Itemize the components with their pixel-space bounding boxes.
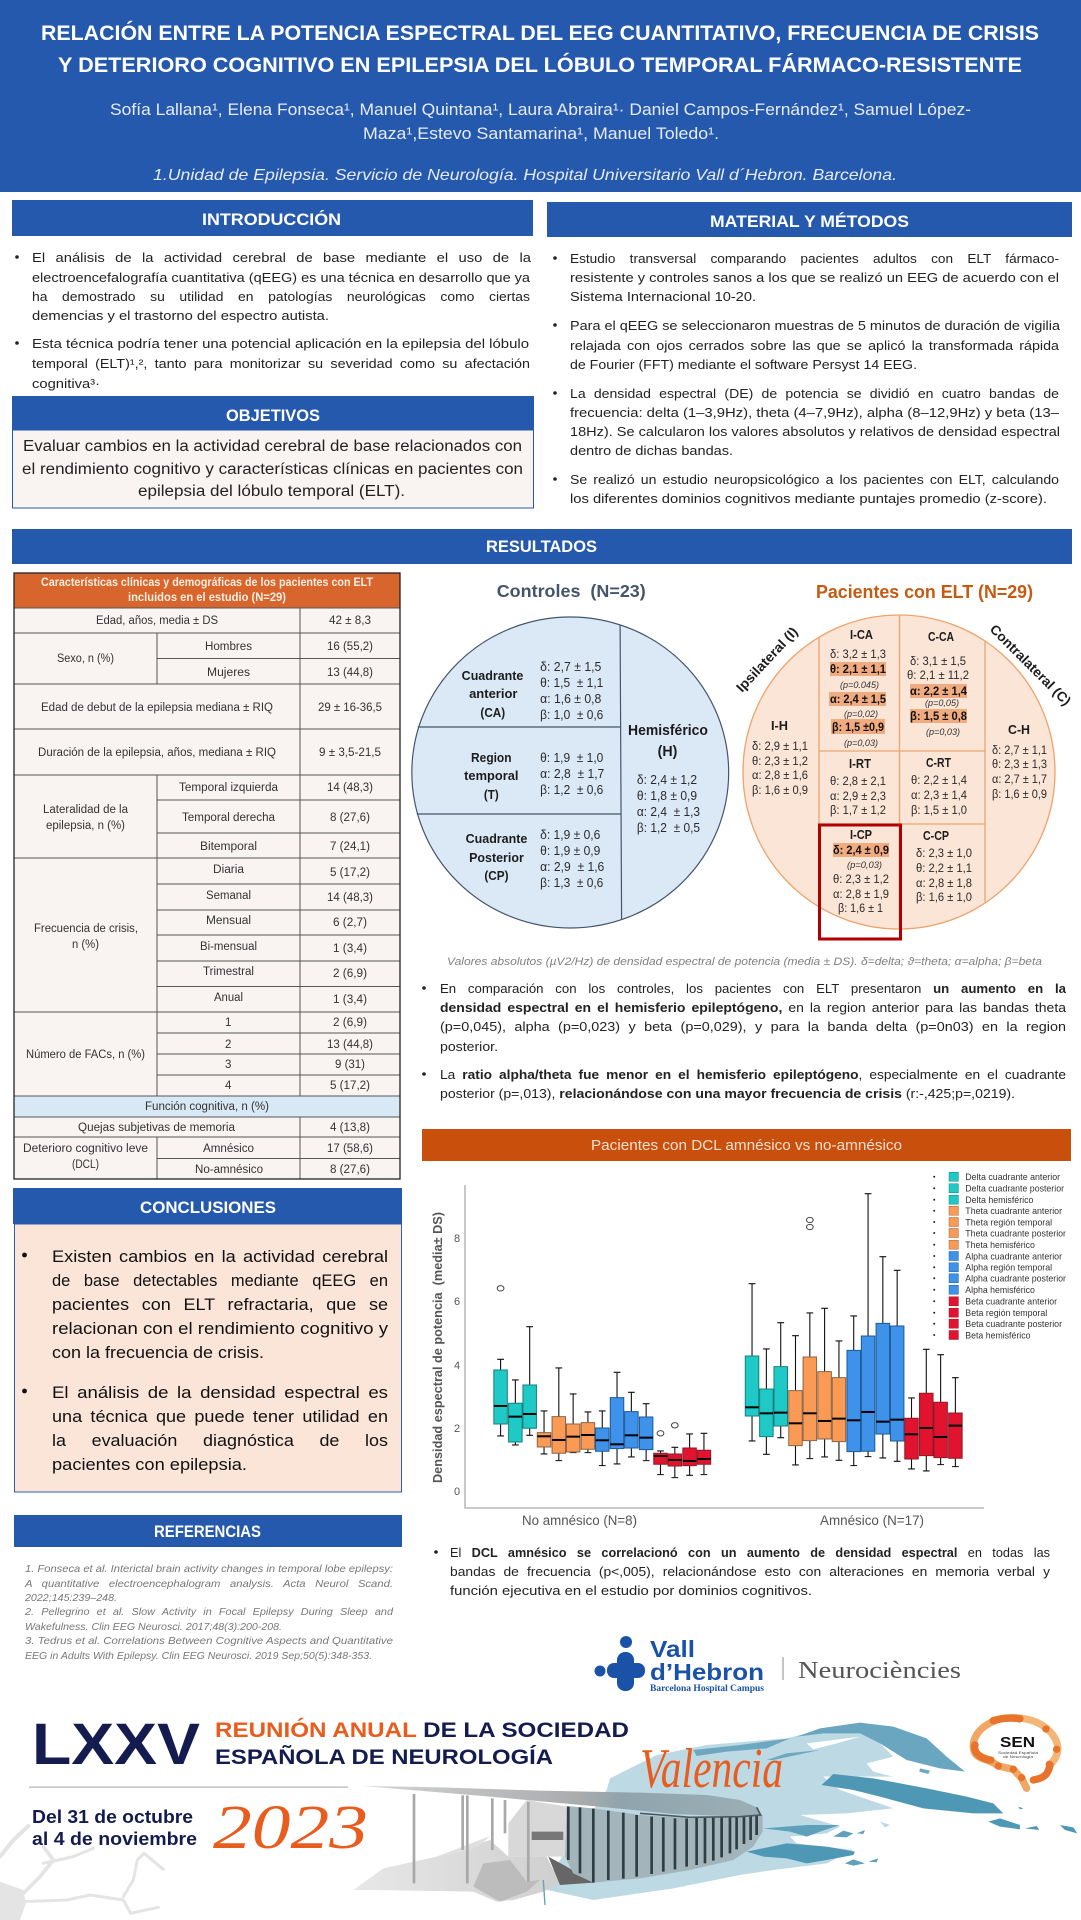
text block: references: EEG in Adults With Epilepsy. Clin EEG Neurosci. 2019 Sep;50(5):348-353.: [25, 1650, 372, 1662]
panel: referencias: [14, 1515, 402, 1662]
text block: introducción: [15, 250, 532, 391]
heading: resultados: [12, 529, 1072, 564]
region: I-H: δ: 2,9 ± 1,1: [752, 741, 808, 753]
text block: métodos: los diferentes dominios cognitivos mediante puntajes promedio (z-score).: [570, 491, 1047, 506]
logo: SEN: SEN: [1000, 1734, 1035, 1751]
region: hemisférico: δ: 2,4 ± 1,2: [637, 773, 697, 787]
table body text: 42 ± 8,3: [329, 615, 371, 627]
region: C-CA: [907, 630, 969, 738]
table body text: 8 (27,6): [330, 1164, 370, 1176]
region: C-RT: [911, 756, 968, 817]
region: C-RT: β: 1,5 ± 1,0: [911, 805, 967, 817]
region: cuadrante posterior: α: 2,9 ± 1,6: [540, 860, 604, 874]
table body text: Semanal: [206, 890, 251, 902]
text block: DCL finding: [434, 1545, 1051, 1598]
affiliation: 1.Unidad de Epilepsia. Servicio de Neurología. Hospital Universitario Vall d´Hebron. Barcelona.: [153, 167, 897, 184]
region: I-CP: α: 2,8 ± 1,9: [833, 889, 889, 901]
region: I-CA: δ: 3,2 ± 1,3: [830, 649, 886, 661]
region: cuadrante posterior: Cuadrante: [466, 831, 527, 846]
authors: [110, 100, 971, 143]
x axis labels: [522, 1513, 924, 1528]
region: cuadrante anterior: [462, 660, 603, 722]
panel: demographics table: [14, 573, 400, 1179]
table body text: Hombres: [205, 641, 252, 653]
region: I-RT: α: 2,9 ± 2,3: [830, 791, 886, 803]
table body text: Bi-mensual: [200, 941, 257, 953]
text block: introducción: Esta técnica podría tener una potencial aplicación en la epilepsia del lóbulo: [32, 336, 529, 351]
congress dates: [32, 1807, 197, 1849]
table body text: 5 (17,2): [330, 1080, 370, 1092]
text block: conclusiones: de base detectables mediante qEEG en: [52, 1272, 388, 1290]
text block: métodos: 18Hz). Se calcularon los valores absolutos y relativos de densidad espectral: [570, 424, 1060, 439]
text block: conclusiones: una técnica que puede tener utilidad en: [52, 1408, 388, 1426]
region: C-H: θ: 2,3 ± 1,3: [992, 759, 1047, 771]
region: hemisférico: θ: 1,8 ± 0,9: [637, 789, 697, 803]
table body text: 7 (24,1): [330, 841, 370, 853]
text block: métodos: Para el qEEG se seleccionaron muestras de 5 minutos de duración de vigilia: [570, 318, 1061, 333]
table body text: Bitemporal: [200, 841, 257, 853]
panel: controles diagram: [412, 581, 729, 928]
table body text: Trimestral: [203, 966, 254, 978]
region: I-CA: (p=0,03): [844, 738, 878, 749]
text block: objetivos: el rendimiento cognitivo y características clínicas en pacientes con: [22, 461, 523, 478]
region: C-RT: θ: 2,2 ± 1,4: [911, 775, 968, 787]
y axis ticks: [454, 1233, 460, 1498]
table body text: Deterioro cognitivo leve: [23, 1143, 148, 1155]
label: contralateral: Contralateral (C): [987, 622, 1074, 708]
region: C-CP: θ: 2,2 ± 1,1: [916, 863, 972, 875]
text block: conclusiones: El análisis de la densidad espectral es: [52, 1384, 388, 1402]
congress title: ESPAÑOLA DE NEUROLOGÍA: [215, 1746, 553, 1769]
title: Y DETERIORO COGNITIVO EN EPILEPSIA DEL LÓBULO TEMPORAL FÁRMACO-RESISTENTE: [58, 53, 1022, 77]
text block: references: 1. Fonseca et al. Interictal brain activity changes in temporal lobe epilepsy:: [25, 1563, 393, 1575]
heading: pacientes: Pacientes con ELT (N=29): [816, 582, 1033, 602]
chart legend: Theta hemisférico: [965, 1239, 1035, 1250]
table body text: Mujeres: [207, 667, 250, 679]
text block: introducción: ha demostrado su utilidad en patologías neurológicas como ciertas: [32, 289, 531, 304]
header band: [0, 0, 1081, 192]
text block: DCL finding: función ejecutiva en el estudio por dominios cognitivos.: [450, 1583, 812, 1598]
text block: references: Wakefulness. Clin EEG Neurosci. 2017;48(3):200-208.: [25, 1621, 282, 1633]
region: cuadrante anterior: anterior: [469, 686, 517, 701]
heading: DCL chart band: Pacientes con DCL amnésico vs no-amnésico: [591, 1138, 902, 1154]
region: I-H: β: 1,6 ± 0,9: [752, 785, 808, 797]
panel: conclusiones: [13, 1188, 402, 1492]
region: hemisférico: β: 1,2 ± 0,5: [637, 821, 700, 835]
region: temporal: α: 2,8 ± 1,7: [540, 767, 604, 781]
chart legend: Delta hemisférico: [965, 1194, 1033, 1205]
table body text: Duración de la epilepsia, años, mediana ± RIQ: [38, 747, 276, 759]
region: C-H: α: 2,7 ± 1,7: [992, 774, 1047, 786]
text block: métodos: [553, 251, 1061, 506]
text block: references: 2022;145:239–248.: [24, 1592, 117, 1604]
region: temporal: temporal: [464, 768, 518, 783]
table body text: Temporal izquierda: [179, 782, 279, 794]
table body text: 3: [225, 1059, 231, 1071]
table body text: n (%): [72, 939, 99, 951]
table body text: Sexo, n (%): [57, 653, 114, 665]
heading: referencias: REFERENCIAS: [154, 1523, 261, 1541]
table body text: Función cognitiva, n (%): [145, 1101, 269, 1113]
highlight: I-CP red box: [820, 825, 900, 939]
region: temporal: [464, 750, 604, 802]
table body text: No-amnésico: [195, 1164, 263, 1176]
region: I-RT: θ: 2,8 ± 2,1: [830, 776, 886, 788]
table body text: Lateralidad de la: [43, 804, 129, 816]
text block: resultados findings: densidad espectral en el hemisferio epileptógeno, en la region anterior para las bandas theta: [440, 1000, 1067, 1015]
text block: métodos: frecuencia: delta (1–3,9Hz), theta (4–7,9Hz), alpha (8–12,9Hz) y beta (13–: [570, 405, 1060, 420]
region: I-CA: (p=0.045): [840, 680, 879, 691]
region: I-RT: I-RT: [849, 757, 871, 771]
logo: Vall d'Hebron Neurociències: Barcelona Hospital Campus: [650, 1683, 765, 1693]
region: I-H: θ: 2,3 ± 1,2: [752, 756, 808, 768]
table body text: Frecuencia de crisis,: [34, 923, 138, 935]
table body text: 13 (44,8): [327, 1039, 373, 1051]
region: cuadrante anterior: β: 1,0 ± 0,6: [540, 708, 603, 722]
table body text: (DCL): [72, 1159, 99, 1171]
text block: métodos: La densidad espectral (DE) de potencia se dividió en cuatro bandas de: [570, 386, 1059, 401]
chart legend: Beta región temporal: [965, 1307, 1047, 1318]
y axis ticks: 4: [454, 1360, 460, 1372]
logo: Vall d'Hebron Neurociències: [594, 1636, 961, 1693]
panel: objetivos: [12, 396, 534, 508]
text block: métodos: Sistema Internacional 10-20.: [570, 289, 756, 304]
banner art: watercolor wash: [540, 1723, 1077, 1900]
region: C-H: β: 1,6 ± 0,9: [992, 789, 1047, 801]
table body text: Edad de debut de la epilepsia mediana ± RIQ: [41, 702, 273, 714]
region: temporal: θ: 1,9 ± 1,0: [540, 751, 603, 765]
table body text: 14 (48,3): [327, 892, 373, 904]
logo: SEN: de Neurología: [1003, 1754, 1034, 1759]
region: temporal: (T): [484, 787, 499, 802]
region: I-CA: θ: 2,1 ± 1,1: [830, 664, 887, 676]
heading: DCL chart band: [422, 1129, 1071, 1161]
y axis label: Densidad espectral de potencia (media± DS): [431, 1212, 445, 1483]
text block: conclusiones: relacionan con el rendimiento cognitivo y: [52, 1320, 389, 1338]
table body text: 29 ± 16-36,5: [318, 702, 382, 714]
table body text: 14 (48,3): [327, 782, 373, 794]
year: 2023: [213, 1794, 368, 1862]
icon: hospital cross: [594, 1636, 645, 1691]
logo: Vall d'Hebron Neurociències: d’Hebron: [650, 1659, 764, 1685]
text block: conclusiones: pacientes con ELT refractaria, que se: [52, 1296, 388, 1314]
region: cuadrante posterior: δ: 1,9 ± 0,6: [540, 828, 600, 842]
region: hemisférico: Hemisférico: [628, 723, 708, 739]
region: C-CA: α: 2,2 ± 1,4: [910, 686, 968, 698]
title: [41, 21, 1039, 77]
region: C-H: [992, 723, 1047, 801]
region: I-H: α: 2,8 ± 1,6: [752, 770, 808, 782]
table body text: 2: [225, 1039, 231, 1051]
logo: Vall d'Hebron Neurociències: Neurociències: [798, 1658, 961, 1684]
table body text: Quejas subjetivas de memoria: [78, 1122, 236, 1134]
region: I-CP: [833, 828, 889, 915]
table body text: 6 (2,7): [333, 917, 367, 929]
chart legend: Theta cuadrante posterior: [965, 1227, 1066, 1238]
table body text: 4: [225, 1080, 232, 1092]
congress title: LXXV: [32, 1712, 200, 1777]
congress dates: Del 31 de octubre: [32, 1807, 193, 1827]
chart legend: Beta cuadrante posterior: [965, 1318, 1062, 1329]
text block: DCL finding: bandas de frecuencia (p<,005), relacionándose esto con alteraciones en memoria verbal y: [450, 1564, 1051, 1579]
region: hemisférico: (H): [658, 744, 678, 760]
region: I-H: I-H: [771, 719, 788, 733]
text block: resultados findings: (p=0,045), alpha (p=0,023) y beta (p=0,029), y para la banda delta (p=0n03) en la region: [440, 1019, 1066, 1034]
region: cuadrante posterior: Posterior: [469, 850, 524, 865]
table body text: 9 ± 3,5-21,5: [319, 747, 381, 759]
authors: Sofía Lallana¹, Elena Fonseca¹, Manuel Quintana¹, Laura Abraira¹· Daniel Campos-Fernández¹, Samuel López-: [110, 100, 971, 119]
congress title: [32, 1712, 629, 1777]
text block: references: 2. Pellegrino et al. Slow Activity in Focal Epilepsy During Sleep and: [24, 1606, 394, 1618]
text block: objetivos: [22, 438, 523, 500]
text block: métodos: Se realizó un estudio neuropsicológico a los pacientes con ELT, calculando: [570, 472, 1059, 487]
banner art: gray watermark: [0, 1826, 163, 1920]
text block: conclusiones: Existen cambios en la actividad cerebral: [52, 1248, 388, 1266]
region: C-H: C-H: [1008, 723, 1030, 737]
region: C-CA: δ: 3,1 ± 1,5: [910, 656, 966, 668]
x axis labels: Amnésico (N=17): [820, 1513, 924, 1528]
text block: conclusiones: [22, 1248, 389, 1474]
chart legend: Alpha región temporal: [965, 1262, 1052, 1273]
text block: métodos: resistente y controles sanos a los que se realizó un EEG de acuerdo con el: [570, 270, 1059, 285]
table body text: 16 (55,2): [327, 641, 373, 653]
text block: conclusiones: la evaluación diagnóstica de los: [52, 1432, 388, 1450]
logo: Vall d'Hebron Neurociències: Vall: [650, 1636, 695, 1662]
text block: conclusiones: con la frecuencia de crisis.: [52, 1344, 264, 1362]
panel: pacientes diagram: [733, 582, 1074, 939]
chart legend: [933, 1171, 1066, 1340]
heading: material y métodos: MATERIAL Y MÉTODOS: [710, 212, 909, 231]
table header: Características clínicas y demográficas de los pacientes con ELT: [41, 577, 373, 589]
boxes: no amnésico: [494, 1286, 711, 1478]
text block: references: [24, 1563, 394, 1662]
table body text: Número de FACs, n (%): [26, 1049, 145, 1061]
region: I-CP: δ: 2,4 ± 0,9: [833, 845, 889, 857]
chart legend: Alpha cuadrante posterior: [965, 1273, 1066, 1284]
text block: resultados findings: La ratio alpha/theta fue menor en el hemisferio epileptógeno , especialmente en el cuadrante: [440, 1067, 1066, 1082]
region: I-CA: [829, 628, 887, 749]
y axis ticks: 2: [454, 1423, 460, 1435]
x axis labels: No amnésico (N=8): [522, 1513, 637, 1528]
y axis ticks: 6: [454, 1296, 460, 1308]
chart legend: Alpha cuadrante anterior: [965, 1250, 1062, 1261]
chart legend: Theta cuadrante anterior: [965, 1205, 1062, 1216]
region: cuadrante posterior: (CP): [484, 868, 509, 883]
congress dates: al 4 de noviembre: [32, 1829, 197, 1849]
region: I-CA: I-CA: [850, 628, 873, 642]
text block: references: 3. Tedrus et al. Correlations Between Cognitive Aspects and Quantitative: [25, 1635, 393, 1647]
heading: controles: Controles (N=23): [497, 581, 646, 601]
text block: introducción: demencias y el trastorno del espectro autista.: [32, 308, 329, 323]
chart legend: Delta cuadrante anterior: [965, 1171, 1060, 1182]
text block: métodos: Estudio transversal comparando pacientes adultos con ELT fármaco-: [570, 251, 1059, 266]
text block: métodos: relajada con ojos cerrados sobre las que se aplicó la transformada rápida: [570, 338, 1060, 353]
region: cuadrante anterior: (CA): [480, 705, 505, 720]
table body text: 4 (13,8): [330, 1122, 370, 1134]
chart legend: Beta hemisférico: [965, 1329, 1030, 1340]
y axis ticks: 8: [454, 1233, 460, 1245]
region: C-CP: δ: 2,3 ± 1,0: [916, 848, 972, 860]
heading: introducción: INTRODUCCIÓN: [202, 210, 341, 229]
table body text: 13 (44,8): [327, 667, 373, 679]
heading: conclusiones: CONCLUSIONES: [140, 1199, 276, 1217]
panel: introducción: [12, 200, 533, 391]
region: C-CP: α: 2,8 ± 1,8: [916, 878, 972, 890]
text block: DCL finding: El DCL amnésico se correlacionó con un aumento de densidad espectral en todas las: [450, 1545, 1050, 1560]
text block: resultados findings: posterior (p=,013), relacionándose con una mayor frecuencia de crisis (r:-,425;p=,0219).: [440, 1086, 1015, 1101]
text block: objetivos: epilepsia del lóbulo temporal (ELT).: [138, 483, 405, 500]
table body text: Mensual: [206, 915, 251, 927]
congress title: REUNIÓN ANUAL DE LA SOCIEDAD: [215, 1718, 629, 1742]
region: C-H: δ: 2,7 ± 1,1: [992, 745, 1047, 757]
region: C-RT: α: 2,3 ± 1,4: [911, 790, 968, 802]
region: C-CP: β: 1,6 ± 1,0: [916, 892, 972, 904]
region: C-CA: (p=0,03): [926, 727, 960, 738]
text block: introducción: temporal (ELT)¹,², tanto para monitorizar su severidad como su afectación: [32, 356, 530, 371]
table body text: 5 (17,2): [330, 867, 370, 879]
text block: conclusiones: pacientes con epilepsia.: [52, 1456, 247, 1474]
authors: Maza¹,Estevo Santamarina¹, Manuel Toledo¹.: [363, 124, 719, 143]
table body text: Anual: [214, 992, 243, 1004]
chart legend: Alpha hemisférico: [965, 1284, 1035, 1295]
region: I-CP: (p=0,03): [847, 860, 882, 871]
y axis ticks: 0: [454, 1486, 460, 1498]
table header: incluidos en el estudio (N=29): [128, 592, 286, 604]
caption: diagram units: Valores absolutos (µV2/Hz) de densidad espectral de potencia (media ± DS). δ=delta; ϑ=theta; α=alpha; β=beta: [447, 956, 1042, 968]
text block: introducción: electroencefalografía cuantitativa (qEEG) es una técnica en desarrollo que ya: [32, 270, 531, 285]
region: hemisférico: α: 2,4 ± 1,3: [637, 805, 700, 819]
region: C-CP: [916, 829, 972, 904]
text block: métodos: de Fourier (FFT) mediante el software Persyst 14 EEG.: [570, 357, 917, 372]
chart legend: Delta cuadrante posterior: [965, 1183, 1064, 1194]
logo: SEN: Sociedad Española: [998, 1750, 1039, 1755]
region: I-RT: [830, 757, 886, 817]
region: cuadrante posterior: [466, 828, 604, 890]
region: I-CA: (p=0,02): [844, 709, 878, 720]
region: temporal: Region: [471, 750, 512, 765]
region: hemisférico: [628, 723, 708, 835]
heading: objetivos: OBJETIVOS: [226, 407, 320, 425]
region: I-CP: θ: 2,3 ± 1,2: [833, 874, 889, 886]
region: cuadrante posterior: β: 1,3 ± 0,6: [540, 876, 603, 890]
region: I-CA: β: 1,5 ±0,9: [832, 722, 884, 734]
chart legend: Beta cuadrante anterior: [965, 1296, 1057, 1307]
region: I-CP: I-CP: [850, 828, 872, 842]
region: cuadrante posterior: θ: 1,9 ± 0,9: [540, 844, 600, 858]
region: I-CA: α: 2,4 ± 1,5: [830, 694, 887, 706]
region: cuadrante anterior: δ: 2,7 ± 1,5: [540, 660, 601, 674]
table body text: 2 (6,9): [333, 968, 367, 980]
boxes: amnésico: [745, 1194, 962, 1471]
text block: introducción: cognitiva³·: [32, 376, 100, 391]
box plot chart: [431, 1171, 1066, 1528]
region: C-CA: θ: 2,1 ± 11,2: [907, 670, 969, 682]
region: C-CP: C-CP: [923, 829, 949, 843]
text block: métodos: dentro de dichas bandas.: [570, 443, 733, 458]
text block: resultados findings: En comparación con los controles, los pacientes con ELT presentaron un aumento en la: [440, 981, 1067, 996]
region: C-RT: C-RT: [926, 756, 951, 770]
banner art: building: [353, 1786, 763, 1905]
table body text: [23, 615, 382, 1176]
logo: SEN: [971, 1715, 1060, 1788]
text block: resultados findings: [422, 981, 1067, 1101]
table body text: Edad, años, media ± DS: [96, 615, 218, 627]
region: I-RT: β: 1,7 ± 1,2: [830, 805, 886, 817]
panel: material y métodos: [547, 202, 1072, 506]
table body text: 8 (27,6): [330, 812, 370, 824]
table body text: 2 (6,9): [333, 1017, 367, 1029]
title: RELACIÓN ENTRE LA POTENCIA ESPECTRAL DEL EEG CUANTITATIVO, FRECUENCIA DE CRISIS: [41, 21, 1039, 45]
region: C-CA: (p=0,05): [925, 698, 959, 709]
region: cuadrante anterior: α: 1,6 ± 0,8: [540, 692, 601, 706]
table body text: Diaria: [213, 864, 245, 876]
label: ipsilateral: Ipsilateral (I): [733, 624, 801, 695]
table body text: Temporal derecha: [182, 812, 276, 824]
table body text: 17 (58,6): [327, 1143, 373, 1155]
region: C-CA: β: 1,5 ± 0,8: [910, 711, 968, 723]
text block: resultados findings: posterior.: [440, 1039, 498, 1054]
table body text: 1: [225, 1017, 231, 1029]
region: cuadrante anterior: θ: 1,5 ± 1,1: [540, 676, 603, 690]
table body text: 9 (31): [335, 1059, 365, 1071]
region: temporal: β: 1,2 ± 0,6: [540, 783, 603, 797]
table body text: 1 (3,4): [333, 994, 367, 1006]
region: cuadrante anterior: Cuadrante: [462, 668, 523, 683]
region: I-H: [752, 719, 808, 797]
heading: resultados: RESULTADOS: [486, 538, 597, 556]
table body text: 1 (3,4): [333, 943, 367, 955]
region: I-CP: β: 1,6 ± 1: [838, 903, 883, 915]
region: C-CA: C-CA: [928, 630, 954, 644]
city: Valencia: [640, 1738, 783, 1800]
text block: introducción: El análisis de la actividad cerebral de base mediante el uso de la: [32, 250, 532, 265]
table header: [41, 577, 373, 604]
chart legend: Theta región temporal: [965, 1216, 1052, 1227]
table body text: Amnésico: [203, 1143, 254, 1155]
text block: objetivos: Evaluar cambios en la actividad cerebral de base relacionados con: [23, 438, 522, 455]
text block: references: A quantitative electroencephalogram analysis. Acta Neurol Scand.: [24, 1578, 393, 1590]
table body text: epilepsia, n (%): [46, 820, 125, 832]
